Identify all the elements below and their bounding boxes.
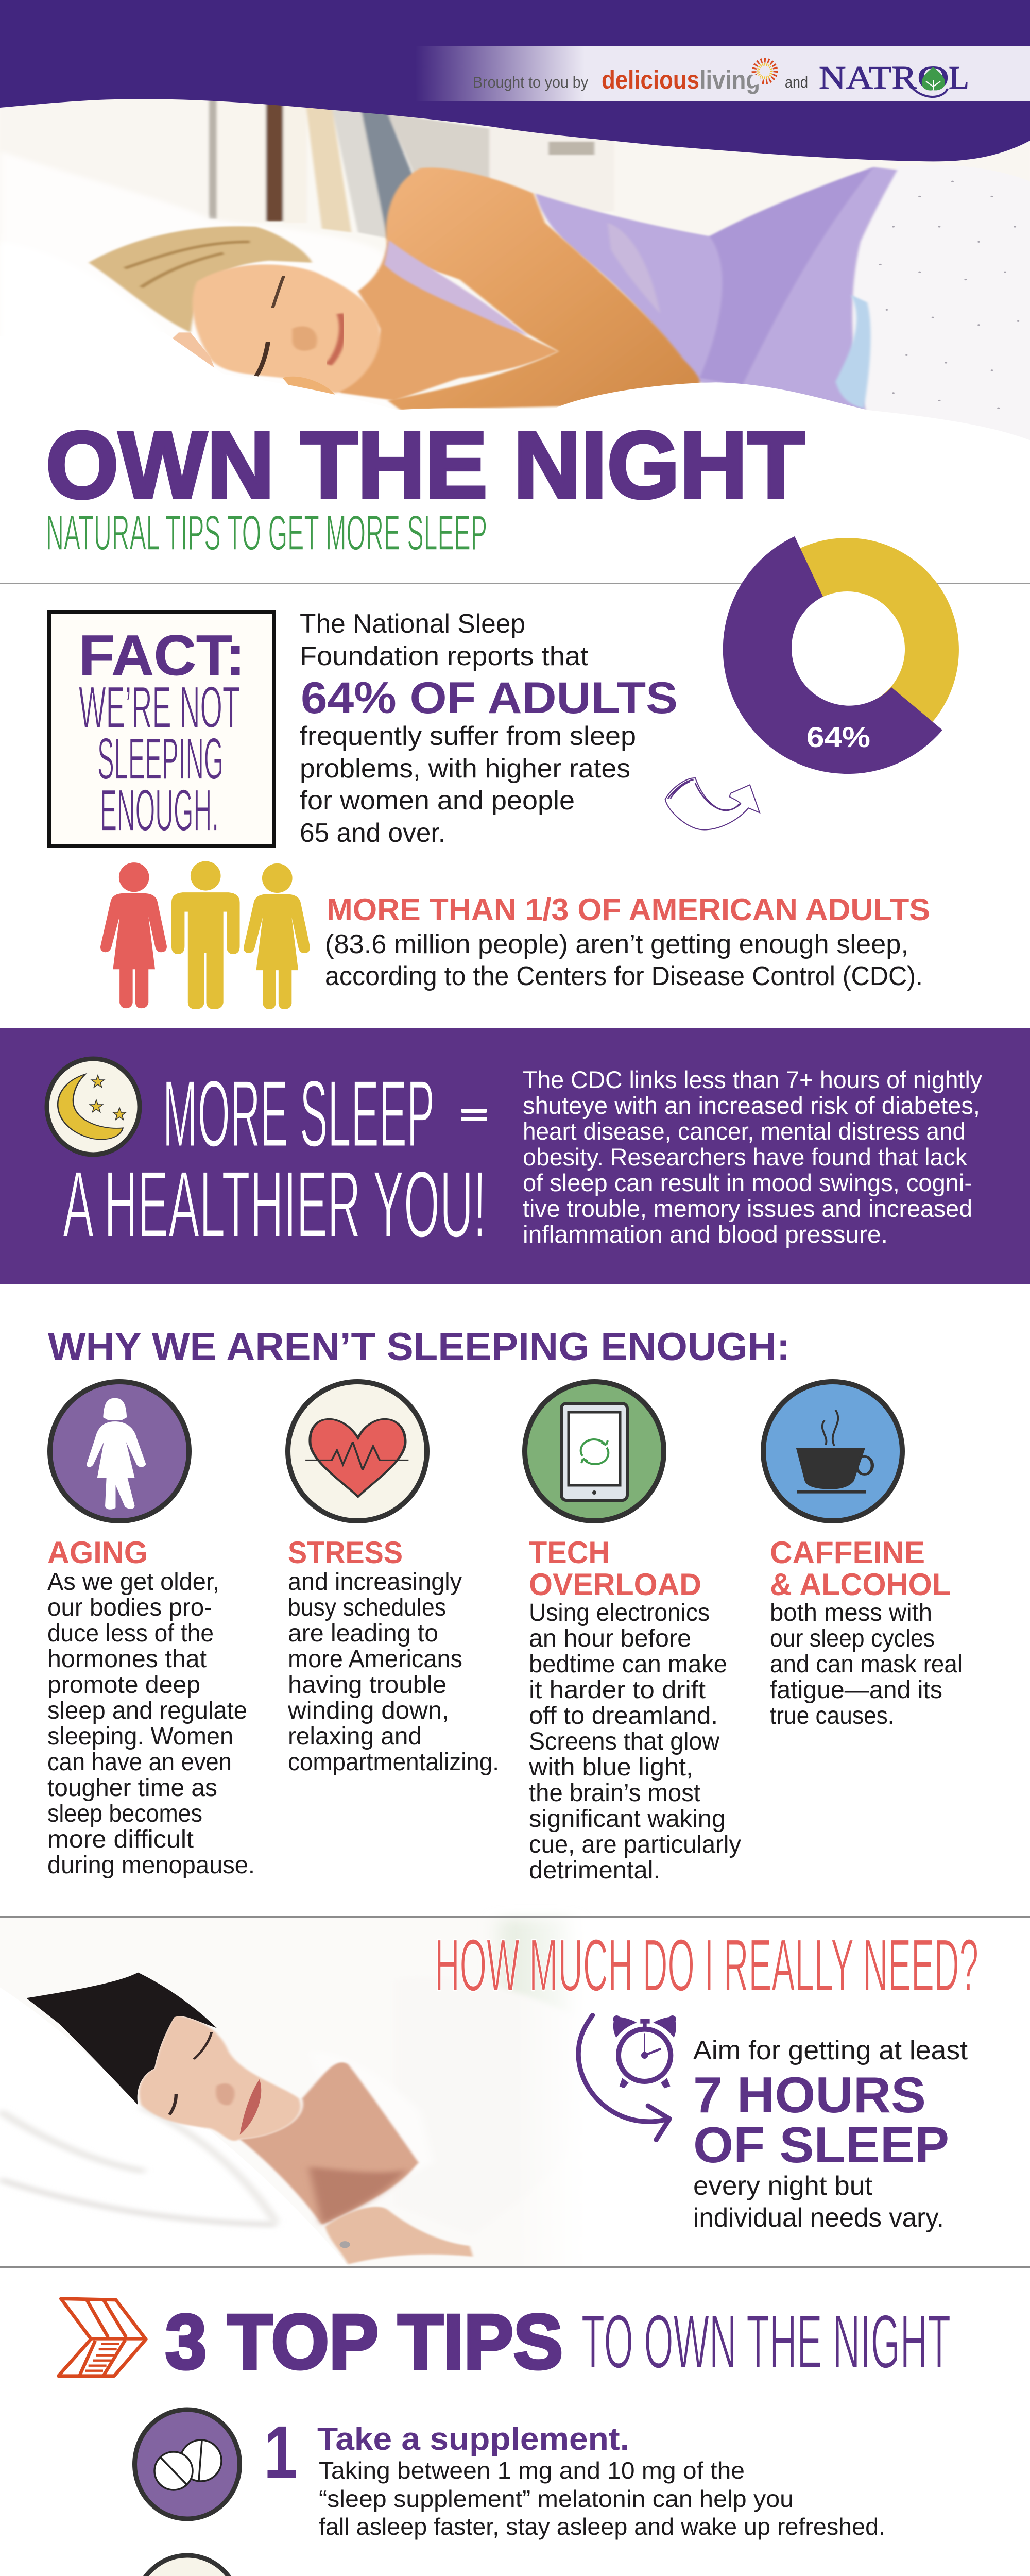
text: seven hours of sleep: Aim for getting at least [693, 2036, 968, 2065]
divider [0, 583, 1030, 584]
logo: delicious living [602, 57, 779, 94]
cause: stress: more Americans [288, 1646, 462, 1673]
stat text: one third of adults [325, 892, 930, 991]
cause: stress: compartmentalizing. [288, 1749, 499, 1776]
hand [325, 2207, 473, 2264]
heading: three top tips [165, 2298, 951, 2385]
tip 2: walk [135, 2555, 768, 2576]
cause: tech overload: OVERLOAD [529, 1567, 701, 1602]
cause: caffeine and alcohol: both mess with [770, 1599, 932, 1626]
cause: stress: busy schedules [288, 1594, 446, 1621]
text: cdc health risks: obesity. Researchers have found that lack [523, 1143, 967, 1171]
logo: Natrol: O [917, 59, 949, 96]
cause: caffeine and alcohol: true causes. [770, 1702, 894, 1730]
face [193, 264, 380, 393]
text: cdc health risks: shuteye with an increased risk of diabetes, [523, 1092, 980, 1119]
cause: caffeine and alcohol [770, 1535, 963, 1730]
icon: three people [100, 861, 310, 1009]
tip 1 text: “sleep supplement” melatonin can help you [319, 2485, 794, 2512]
heading: three top tips: 3 TOP TIPS [165, 2298, 563, 2385]
camisole strap lace [384, 240, 529, 336]
icon: moon and stars [47, 1059, 140, 1155]
tip 1 text [317, 2421, 885, 2540]
logo: delicious living: living [699, 65, 760, 94]
text: seven hours of sleep: OF SLEEP [693, 2116, 949, 2173]
skin: arm [386, 167, 699, 410]
pillow [0, 1988, 348, 2266]
cause: tech overload: an hour before [529, 1625, 691, 1652]
panel: more sleep: A HEALTHIER YOU! [63, 1151, 486, 1257]
cause: aging: AGING [47, 1535, 148, 1570]
cause: aging: promote deep [47, 1671, 200, 1699]
cause: caffeine and alcohol: fatigue—and its [770, 1676, 942, 1704]
text: seven hours of sleep: individual needs vary. [693, 2203, 944, 2233]
fact box: WE’RE NOT [79, 675, 240, 740]
cause: aging [47, 1535, 255, 1879]
cause: stress: are leading to [288, 1620, 438, 1647]
cause: tech overload: significant waking [529, 1805, 726, 1833]
subtitle: NATURAL TIPS TO GET MORE SLEEP [46, 505, 487, 561]
cause: aging: our bodies pro- [47, 1594, 212, 1621]
cause: stress [287, 1535, 499, 1776]
cause: tech overload: Using electronics [529, 1599, 710, 1626]
text: cdc health risks: heart disease, cancer, mental distress and [523, 1117, 966, 1145]
person: man yellow [171, 861, 240, 1009]
logo: delicious living: delicious [602, 65, 699, 94]
cause: tech overload: TECH [529, 1535, 610, 1570]
text: seven hours of sleep: every night but [693, 2171, 873, 2201]
stat text: one third of adults: according to the Centers for Disease Control (CDC). [325, 961, 923, 991]
cause: caffeine and alcohol: our sleep cycles [770, 1625, 935, 1652]
cause: aging: during menopause. [47, 1852, 255, 1879]
icon: aging [50, 1382, 189, 1521]
cause: stress: STRESS [288, 1535, 403, 1570]
text: cdc health risks: tive trouble, memory issues and increased [523, 1195, 972, 1222]
heading: more sleep equals a healthier you: MORE SLEEP [163, 1060, 435, 1166]
cause: aging: more difficult [47, 1826, 194, 1853]
cause: stress: winding down, [287, 1697, 449, 1724]
icon: sketched arrow [665, 778, 760, 829]
donut label: 64% [806, 721, 870, 753]
stat text: one third of adults: MORE THAN 1/3 OF AMERICAN ADULTS [327, 892, 930, 927]
tip 1: supplement [135, 2410, 885, 2540]
fact text: for women and people [300, 786, 575, 816]
panel: more sleep [0, 1028, 1030, 1284]
header purple wave [0, 0, 1030, 161]
cause: aging: sleep and regulate [47, 1697, 247, 1724]
icon: coffee cup [763, 1382, 902, 1521]
header sponsor banner [415, 46, 1030, 101]
icon: stress heart [288, 1382, 427, 1521]
cause: aging: sleep becomes [47, 1800, 202, 1827]
fact box [49, 612, 274, 846]
icon: alarm clock with arrow [578, 2015, 676, 2140]
cause: stress: and increasingly [288, 1568, 462, 1596]
cause: aging: can have an even [47, 1749, 232, 1776]
text: seven hours of sleep: 7 HOURS [693, 2066, 926, 2123]
cause: tech overload [528, 1535, 741, 1884]
photo: sleeping woman under white duvet [0, 1918, 1030, 2267]
cause: tech overload: bedtime can make [529, 1651, 727, 1678]
cause: tech overload: detrimental. [529, 1857, 660, 1884]
person: woman red [100, 862, 167, 1008]
icon: tablet [525, 1382, 664, 1521]
fact text: 65 and over. [300, 818, 445, 848]
fact text: 64% OF ADULTS [301, 673, 678, 723]
logo: Natrol: NATR [819, 59, 917, 96]
cause: tech overload: with blue light, [528, 1754, 693, 1781]
cause: aging: As we get older, [47, 1568, 219, 1596]
chest and neck [240, 2062, 418, 2225]
icon: pills [135, 2410, 240, 2519]
skin: chest [315, 242, 558, 400]
sponsor text: Brought to you by [473, 73, 588, 91]
cause: aging: duce less of the [47, 1620, 214, 1647]
cause: caffeine and alcohol: and can mask real [770, 1651, 963, 1678]
cause: tech overload: off to dreamland. [529, 1702, 718, 1730]
fact text: Foundation reports that [300, 641, 589, 671]
cause: aging: tougher time as [47, 1774, 217, 1802]
cause: tech overload: the brain’s most [529, 1780, 700, 1807]
fact box: SLEEPING [97, 726, 224, 792]
fact text: problems, with higher rates [300, 754, 630, 784]
camisole [536, 167, 897, 410]
hair [26, 1973, 217, 2105]
hair [89, 226, 312, 332]
text: seven hours of sleep [693, 2036, 968, 2233]
and: and [785, 73, 808, 91]
cause: stress: having trouble [288, 1671, 447, 1699]
logo: Natrol [819, 59, 969, 97]
dividers [0, 1916, 1030, 2268]
fingers [157, 332, 217, 374]
title: OWN THE NIGHT [46, 412, 804, 518]
cause: aging: sleeping. Women [47, 1723, 233, 1750]
tip 1 text: Taking between 1 mg and 10 mg of the [319, 2457, 745, 2484]
tip 1 text: fall asleep faster, stay asleep and wake up refreshed. [319, 2513, 885, 2540]
white duvet [0, 328, 1030, 592]
drawstring [835, 295, 871, 408]
text: cdc health risks: The CDC links less than 7+ hours of nightly [523, 1066, 982, 1093]
cause: caffeine and alcohol: CAFFEINE [770, 1535, 925, 1570]
fact text: The National Sleep [300, 609, 525, 639]
hero photo: sleeping woman [0, 83, 1030, 592]
fact text: frequently suffer from sleep [300, 721, 636, 751]
cause: tech overload: it harder to drift [529, 1676, 706, 1704]
cause: aging: hormones that [47, 1646, 207, 1673]
stat text: one third of adults: (83.6 million people) aren’t getting enough sleep, [325, 929, 908, 959]
logo: Natrol: L [949, 59, 969, 96]
person: woman yellow [244, 863, 310, 1009]
face [139, 2015, 301, 2141]
pajama trousers [853, 165, 1030, 442]
fact box: ENOUGH. [100, 778, 219, 843]
number 1: 1 [264, 2411, 298, 2494]
fact text [300, 609, 678, 848]
text: cdc health risks: inflammation and blood pressure. [523, 1221, 888, 1248]
text: cdc health risks [523, 1066, 982, 1248]
cause: stress: relaxing and [288, 1723, 422, 1750]
cause: tech overload: cue, are particularly [529, 1831, 741, 1858]
cause: tech overload: Screens that glow [529, 1728, 719, 1755]
pillow [0, 151, 394, 416]
heading: why we aren't sleeping enough: WHY WE AREN’T SLEEPING ENOUGH: [48, 1325, 790, 1369]
cause: caffeine and alcohol: & ALCOHOL [770, 1567, 951, 1602]
tip 1 text: Take a supplement. [317, 2421, 629, 2457]
fact box: FACT: [79, 624, 245, 687]
heading: more sleep equals a healthier you [63, 1060, 487, 1257]
icon: sneaker [135, 2555, 240, 2576]
donut chart 64% [723, 536, 959, 774]
icon: chevron [58, 2299, 146, 2376]
text: cdc health risks: of sleep can result in mood swings, cogni- [523, 1169, 972, 1196]
